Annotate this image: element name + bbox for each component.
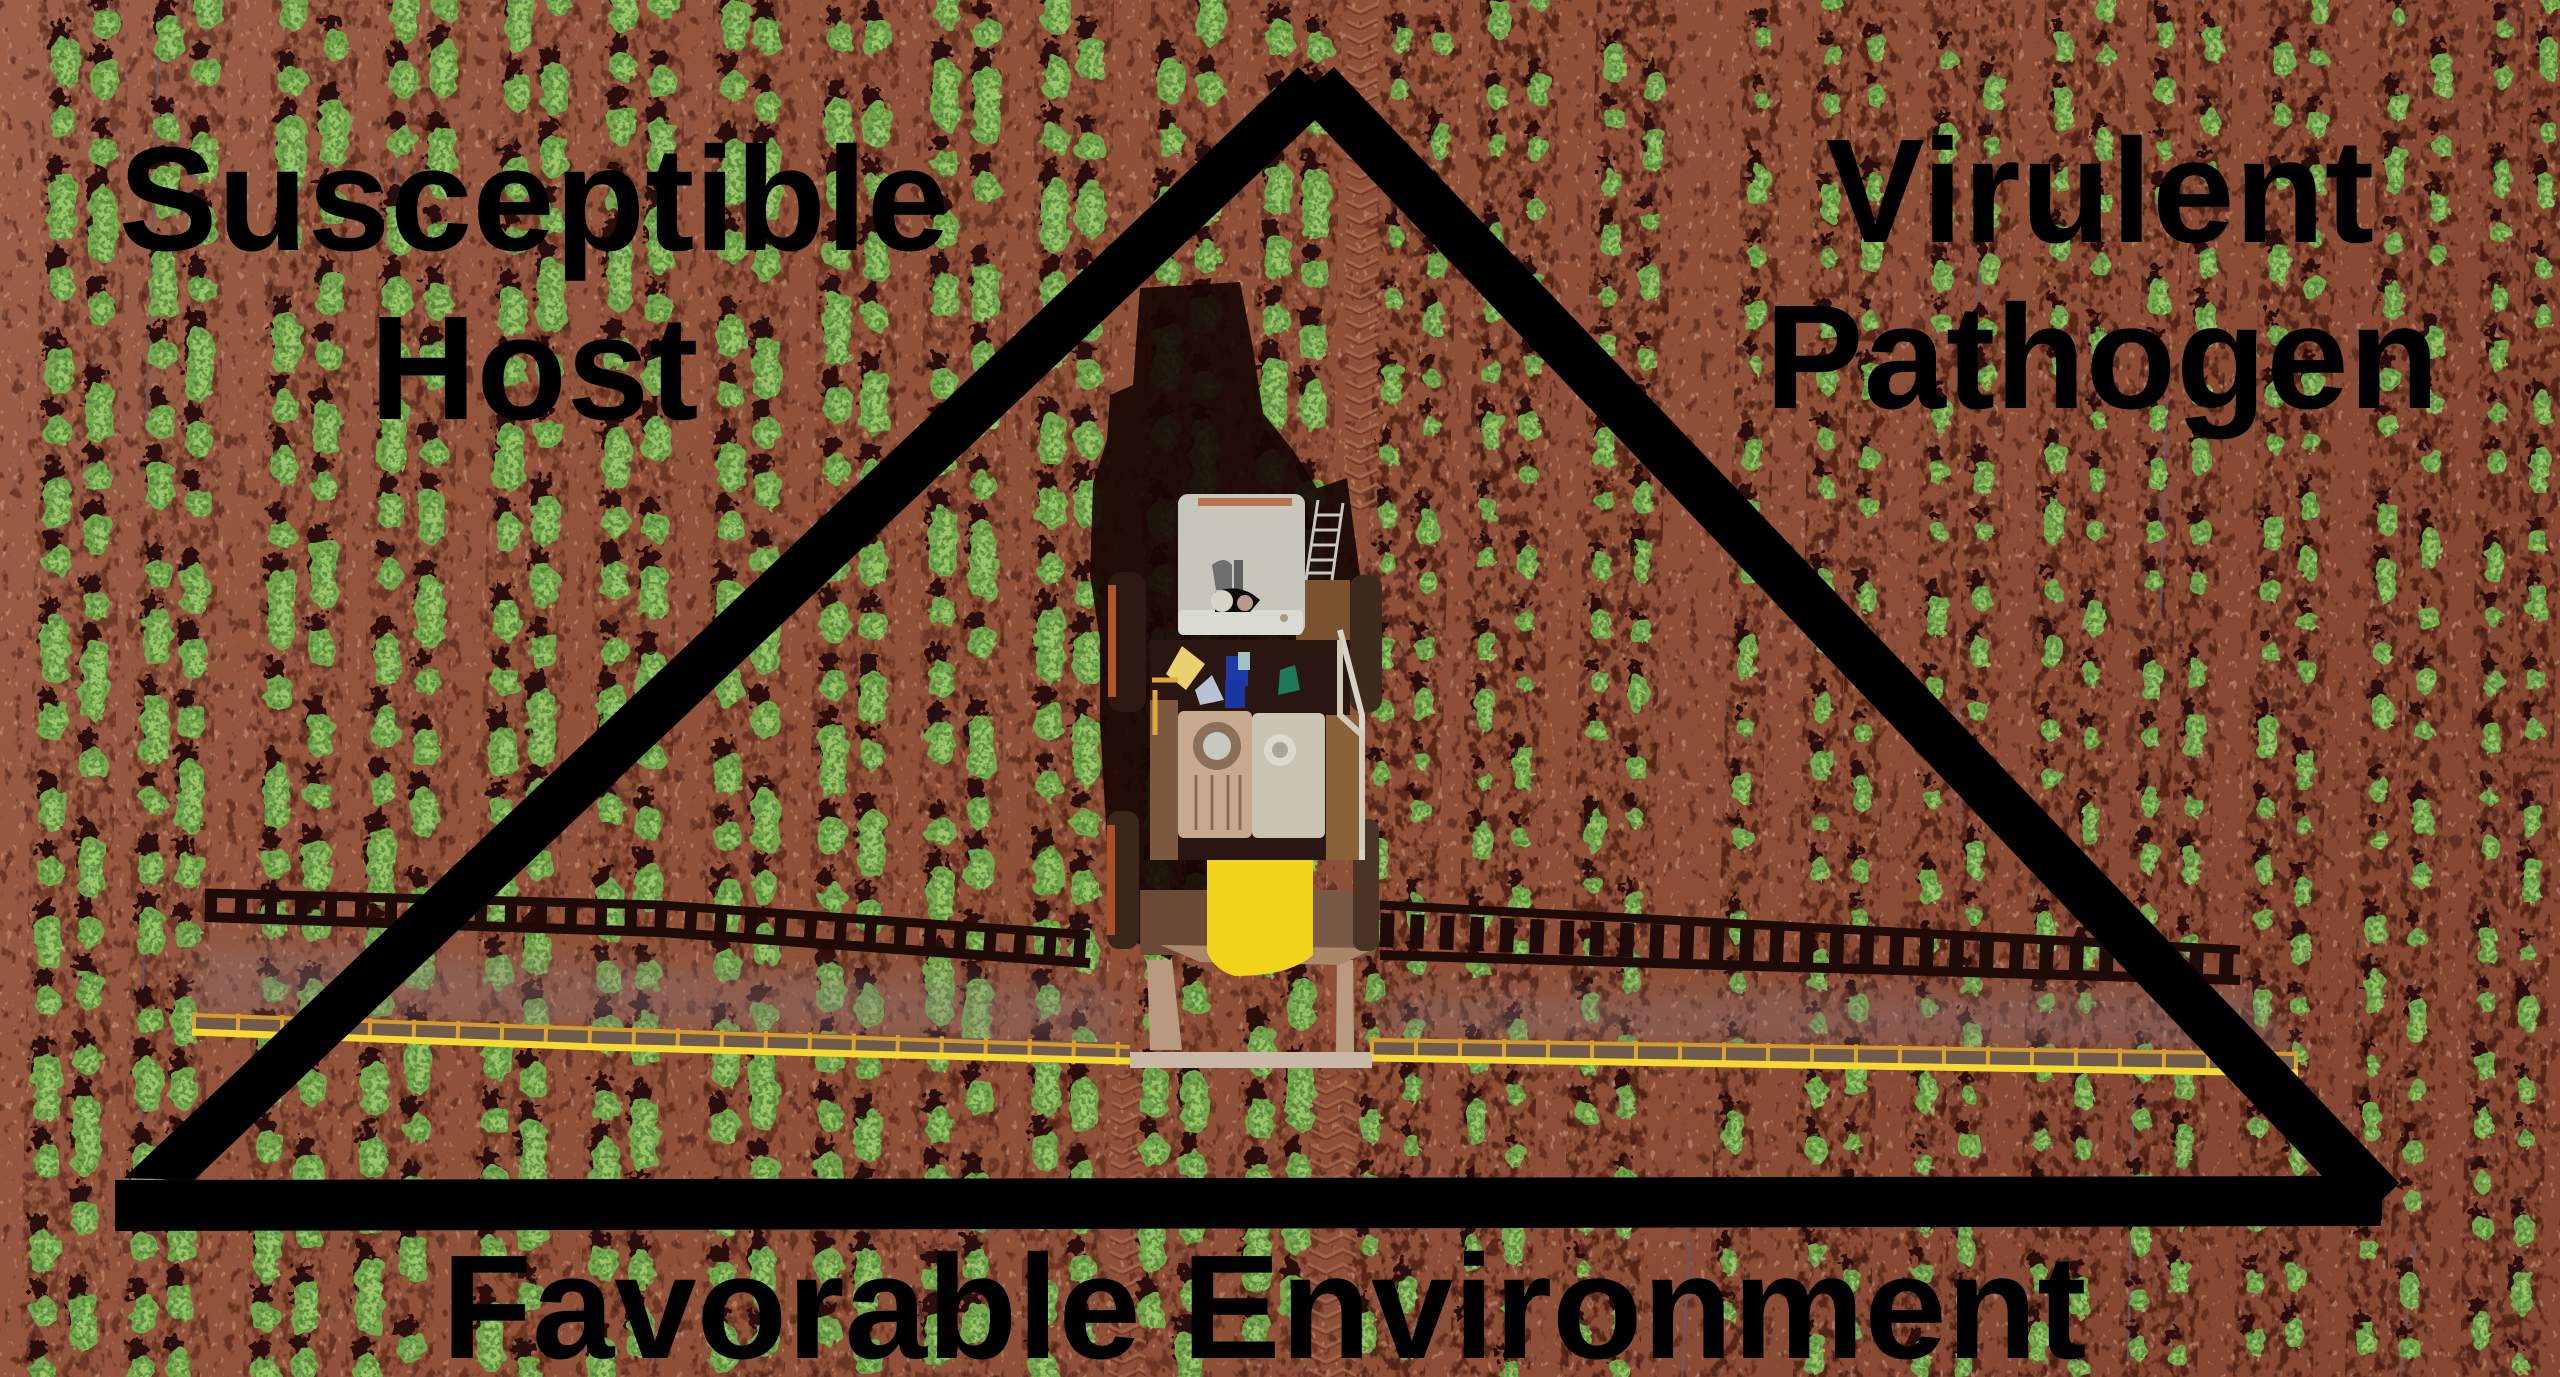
triangle: left side [124, 67, 1315, 1180]
label: Virulent Pathogen: Pathogen [1765, 275, 2439, 440]
ladder [1306, 500, 1343, 580]
sprayer boom right [1370, 1040, 2298, 1073]
sprayer tractor [1107, 494, 1382, 1068]
boom shadow left [205, 893, 1090, 963]
label: Susceptible Host: Host [370, 286, 698, 451]
label: Susceptible Host: Susceptible [119, 117, 949, 282]
cab roof [1178, 494, 1305, 635]
triangle: base [115, 1176, 2381, 1231]
label: Virulent Pathogen: Virulent [1826, 109, 2374, 274]
left tank [1178, 711, 1252, 838]
right front wheel [1350, 575, 1382, 712]
yellow side panel [1166, 646, 1205, 690]
tractor shadow [1090, 282, 1360, 960]
spray mist band [195, 945, 2300, 1055]
boom shadow right [1380, 905, 2240, 980]
platform mesh [1296, 580, 1350, 851]
rear hoses and hitch [1130, 890, 1375, 1068]
tire tracks [1108, 0, 1378, 1377]
right rear wheel [1353, 819, 1379, 951]
right tank [1252, 713, 1325, 838]
label: Virulent Pathogen [1765, 109, 2439, 440]
chassis [1150, 640, 1350, 860]
triangle: right side [1315, 67, 2399, 1220]
yellow box [1207, 860, 1313, 976]
blue containers [1195, 652, 1300, 708]
left rear wheel [1107, 811, 1139, 949]
sprayer boom left [192, 1015, 1130, 1061]
label: Susceptible Host [119, 117, 949, 451]
left front wheel [1108, 572, 1146, 712]
